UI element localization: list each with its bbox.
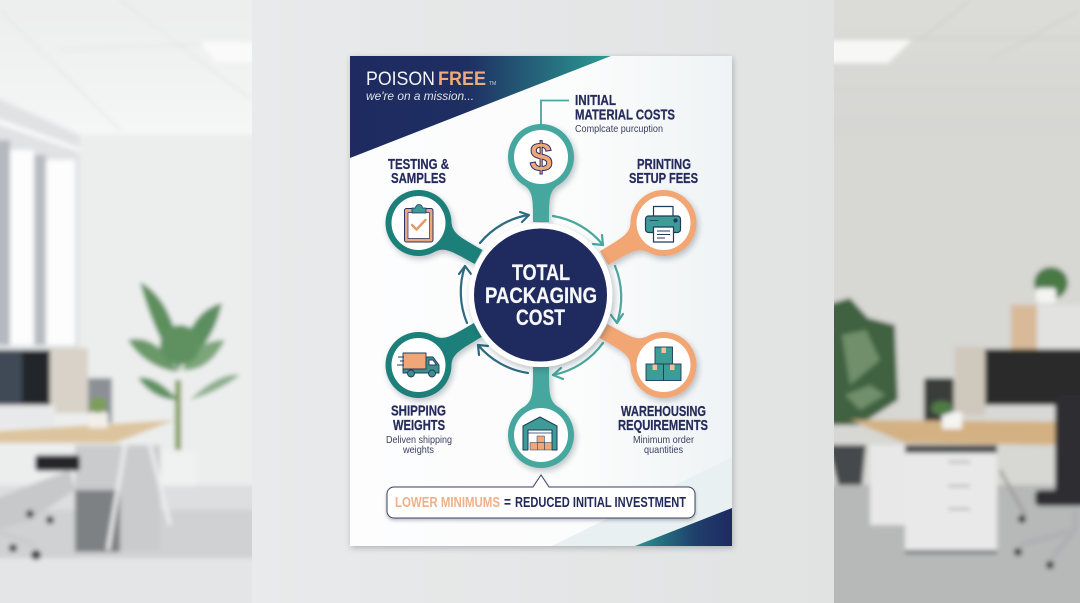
heading: warehousing requirements: WAREHOUSING xyxy=(621,403,706,420)
heading: printing setup fees: SETUP FEES xyxy=(629,170,698,187)
heading: warehousing requirements: quantities xyxy=(644,444,683,456)
heading: printing setup fees xyxy=(629,156,698,187)
icon: stacked boxes xyxy=(646,347,681,380)
callout xyxy=(387,475,695,518)
poster sheet xyxy=(350,56,732,546)
header banner xyxy=(350,56,611,158)
hub title: TOTAL xyxy=(512,260,570,285)
logo: FREE xyxy=(438,69,486,90)
logo: TM xyxy=(489,81,496,87)
heading: initial material costs: MATERIAL COSTS xyxy=(575,106,675,124)
background: right office xyxy=(826,0,1080,603)
center hub xyxy=(468,223,612,367)
node: warehousing requirements xyxy=(596,317,696,398)
hub title xyxy=(485,260,597,330)
node: testing and samples xyxy=(386,190,486,271)
heading: warehousing requirements: REQUIREMENTS xyxy=(618,417,708,434)
logo: POISON xyxy=(366,69,435,90)
corner triangle xyxy=(635,508,732,546)
callout: LOWER MINIMUMS xyxy=(395,495,500,511)
heading: shipping weights xyxy=(386,402,452,456)
heading: warehousing requirements xyxy=(618,403,708,456)
poster xyxy=(350,56,732,546)
node: printing setup fees xyxy=(596,190,696,272)
logo xyxy=(366,69,496,90)
heading: printing setup fees: PRINTING xyxy=(637,156,691,173)
light corner band xyxy=(552,457,732,546)
icon: dollar: $ xyxy=(530,134,553,180)
heading: testing and samples xyxy=(388,156,449,187)
icon: clipboard xyxy=(404,204,433,242)
heading: initial material costs: INITIAL xyxy=(575,92,616,109)
icon: warehouse xyxy=(523,417,557,450)
heading: shipping weights: weights xyxy=(402,444,434,456)
wall panel xyxy=(252,0,834,603)
cycle arrows xyxy=(459,212,623,379)
icon: printer xyxy=(646,206,680,242)
node: initial material costs xyxy=(508,100,574,222)
tagline: we're on a mission... xyxy=(366,91,474,103)
heading: initial material costs xyxy=(575,92,675,135)
heading: warehousing requirements: Minimum order xyxy=(633,434,694,446)
heading: shipping weights: SHIPPING xyxy=(391,402,446,420)
background: left office xyxy=(0,0,270,603)
icon: truck xyxy=(397,353,439,377)
heading: shipping weights: WEIGHTS xyxy=(393,417,445,434)
heading: initial material costs: Complcate purcuption xyxy=(575,123,663,135)
heading: shipping weights: Deliven shipping xyxy=(386,434,452,446)
node: warehouse bottom xyxy=(508,367,574,468)
node: shipping weights xyxy=(386,316,486,398)
callout: = xyxy=(504,495,511,511)
callout: REDUCED INITIAL INVESTMENT xyxy=(515,495,686,511)
heading: testing and samples: SAMPLES xyxy=(391,170,446,187)
heading: testing and samples: TESTING & xyxy=(388,156,449,173)
hub title: PACKAGING xyxy=(485,283,597,308)
hub title: COST xyxy=(516,305,565,330)
